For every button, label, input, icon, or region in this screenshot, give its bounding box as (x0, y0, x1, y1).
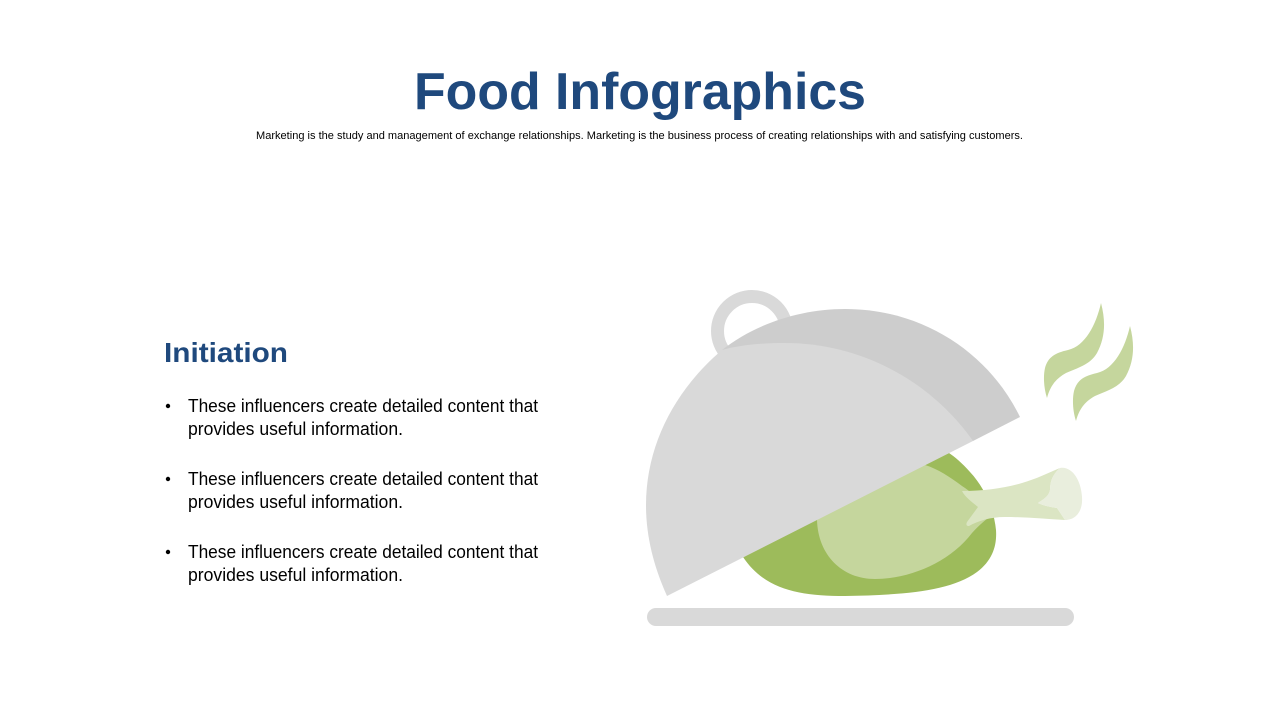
icon: cloche handle ring (718, 296, 786, 366)
bullet item 3: provides useful information. (188, 565, 403, 585)
bullet item 1: These influencers create detailed content that (188, 396, 538, 416)
icon: steam wisp 2 (1073, 326, 1133, 421)
icon: drumstick bone (962, 468, 1065, 526)
bullet item 1: provides useful information. (188, 419, 403, 439)
icon: drumstick bone end (1038, 468, 1082, 520)
icon: tray (647, 608, 1074, 626)
icon: steam wisp 1 (1044, 303, 1104, 398)
title: Food Infographics (414, 63, 866, 121)
icon: cloche back lid (722, 309, 1020, 441)
bullet item 3: These influencers create detailed content that (188, 542, 538, 562)
icon: chicken highlight (817, 465, 990, 579)
bullet item 3 (166, 542, 538, 585)
heading: initiation: Initiation (164, 337, 288, 368)
icon: chicken body (743, 453, 996, 596)
subtitle: Marketing is the study and management of exchange relationships. Marketing is the business process of creating relationships with and satisfying customers. (256, 130, 1023, 142)
bullet item 1 (166, 396, 538, 439)
icon: cloche front lid (646, 343, 973, 596)
bullet item 2: These influencers create detailed content that (188, 469, 538, 489)
bullet item 2 (166, 469, 538, 512)
bullet item 2: provides useful information. (188, 492, 403, 512)
panel: initiation text (164, 337, 538, 585)
icon: food cloche with roast chicken (646, 296, 1133, 626)
